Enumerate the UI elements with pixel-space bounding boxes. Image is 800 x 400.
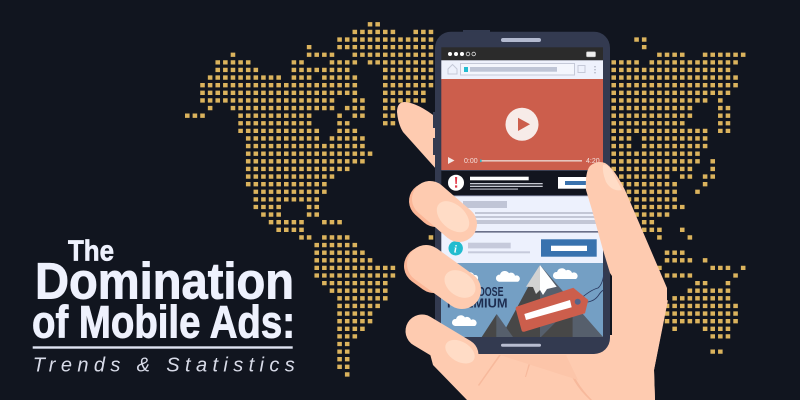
ad headline: CHOOSE	[465, 284, 504, 299]
icon: info	[448, 241, 463, 256]
title line: The: The	[68, 236, 114, 268]
premium ad banner	[441, 263, 603, 337]
video player: 4:20	[586, 158, 600, 165]
title line: of Mobile Ads: of Mobile Ads:	[32, 296, 295, 347]
icon: lock	[464, 67, 468, 72]
player controls	[448, 157, 454, 164]
video player: 0:00	[464, 158, 478, 165]
clouds	[452, 268, 578, 326]
ad headline: PREMIUM	[447, 295, 508, 310]
snow cap	[526, 265, 540, 294]
alert button	[558, 177, 597, 189]
finger: middle	[427, 195, 475, 238]
palm creases	[478, 355, 592, 400]
info ad panel	[441, 233, 603, 263]
browser address bar	[441, 60, 603, 79]
main mountain	[506, 265, 540, 337]
info button	[541, 239, 597, 257]
url field	[460, 64, 574, 75]
phone side buttons	[433, 30, 490, 155]
title line: Domination: Domination	[35, 252, 294, 309]
title rule	[33, 346, 293, 349]
icon: home	[448, 64, 457, 74]
video player	[441, 79, 603, 170]
dotted world map	[185, 24, 745, 374]
play button	[506, 108, 538, 141]
phone body	[435, 32, 610, 354]
thumb	[586, 162, 667, 400]
tag body	[516, 288, 588, 332]
smartphone	[422, 30, 667, 400]
icon: alert	[448, 175, 464, 191]
front mountains	[482, 314, 497, 337]
info ad panel: i	[454, 244, 458, 256]
icon: menu dots	[594, 66, 596, 73]
tag string	[578, 272, 604, 302]
alert ad strip	[441, 170, 603, 196]
index finger behind phone	[397, 102, 437, 170]
icon: tab	[578, 66, 585, 72]
finger: ring	[423, 264, 481, 304]
subtitle: Trends & Statistics	[33, 355, 295, 377]
thumb nail	[603, 165, 622, 190]
text article panel	[441, 195, 603, 233]
hand: palm behind phone	[397, 102, 668, 400]
price tag	[516, 272, 604, 332]
title block	[32, 236, 295, 377]
home bar	[501, 344, 541, 347]
finger: pinky	[422, 331, 479, 368]
status bar	[441, 47, 603, 60]
speaker	[501, 38, 541, 42]
